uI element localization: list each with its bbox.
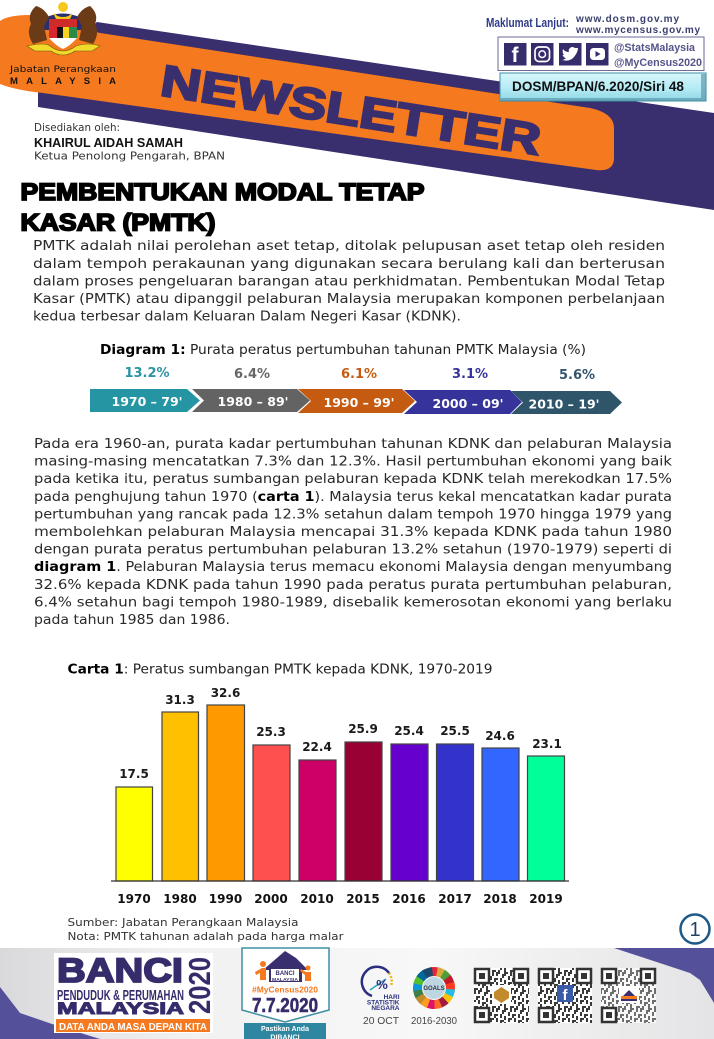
bar values: 23.1 xyxy=(532,737,562,751)
period 1990-99: 6.1% xyxy=(341,367,377,382)
bar chart xyxy=(111,686,569,906)
bar values: 24.6 xyxy=(485,729,515,743)
icon: sustainable development goals wheel xyxy=(411,965,457,1027)
main paragraph: masing-masing mencatatkan 7.3% dan 12.3%. Hasil pertumbuhan ekonomi yang baik xyxy=(34,455,673,470)
main paragraph: pada tahun 1985 dan 1986. xyxy=(34,613,230,628)
period 1970-79: 13.2% xyxy=(124,366,170,381)
census date badge: 7.7.2020 xyxy=(252,995,318,1017)
bar values: 25.5 xyxy=(440,724,470,738)
header banner xyxy=(0,15,714,210)
icon: sustainable development goals wheel: 2016-2030 xyxy=(411,1016,457,1027)
banci logo: DATA ANDA MASA DEPAN KITA xyxy=(59,1022,207,1033)
intro paragraph: kedua terbesar dalam Keluaran Dalam Negeri Kasar (KDNK). xyxy=(33,310,461,324)
QR code: department xyxy=(474,968,529,1023)
intro paragraph: dalam tempoh perakaunan yang digunakan secara berulang kali dan berterusan xyxy=(33,257,665,272)
diagram 1 timeline xyxy=(90,366,622,414)
icon: facebook xyxy=(504,43,526,67)
icon: hari statistik negara: 20 OCT xyxy=(363,1016,399,1027)
chart heading: Carta 1: Peratus sumbangan PMTK kepada KDNK, 1970-2019 xyxy=(68,662,492,678)
period 2000-09: 2000 – 09' xyxy=(433,396,503,411)
further information links: www.dosm.gov.my xyxy=(575,14,679,25)
period 1990-99 xyxy=(298,367,415,413)
year labels: 1990 xyxy=(209,892,242,906)
icon: hari statistik negara xyxy=(362,967,400,1027)
year labels: 2010 xyxy=(300,892,334,906)
census date badge: #MyCensus2020 xyxy=(252,984,318,994)
main paragraph: pada ketika itu, peratus sumbangan pelaburan kepada KDNK telah merekodkan 17.5% xyxy=(34,472,672,487)
period 2000-09 xyxy=(404,367,522,414)
bar values: 31.3 xyxy=(165,693,195,707)
further information links xyxy=(486,14,700,36)
year labels: 2017 xyxy=(438,892,472,906)
author block: Disediakan oleh: xyxy=(34,122,120,134)
period 1990-99: 1990 – 99' xyxy=(324,395,394,410)
banci logo: MALAYSIA xyxy=(57,999,184,1018)
department name xyxy=(9,65,116,87)
year labels: 2019 xyxy=(529,892,563,906)
period 2000-09: 3.1% xyxy=(452,367,488,382)
department name: MALAYSIA xyxy=(10,76,116,87)
bar values: 25.4 xyxy=(394,724,424,738)
intro paragraph xyxy=(33,239,665,324)
further information links: Maklumat Lanjut: xyxy=(486,16,569,30)
main paragraph: pada penghujung tahun 1970 ( carta 1 ). Malaysia terus kekal mencatatkan kadar purata xyxy=(34,490,672,505)
main paragraph: Pada era 1960-an, purata kadar pertumbuhan tahunan KDNK dan pelaburan Malaysia xyxy=(34,437,672,452)
census call to action: Pastikan Anda xyxy=(261,1026,309,1033)
year labels: 2016 xyxy=(392,892,426,906)
icon: instagram xyxy=(531,43,554,66)
icon: census house: BANCI xyxy=(276,971,295,977)
publication reference box xyxy=(500,73,706,101)
main paragraph: dengan purata peratus pertumbuhan pelaburan 13.2% setahun (1970-1979) seperti di xyxy=(34,543,672,558)
title xyxy=(20,179,424,236)
bar values: 17.5 xyxy=(119,767,149,781)
main paragraph xyxy=(34,437,673,628)
department name: Jabatan Perangkaan xyxy=(9,65,116,75)
banci logo: 2020 xyxy=(182,957,217,1014)
bar values: 22.4 xyxy=(302,740,332,754)
main paragraph: pertumbuhan yang rancak pada 12.3% setahun dalam tempoh 1970 hingga 1979 yang xyxy=(34,507,672,522)
icon: sustainable development goals wheel: GOALS xyxy=(423,986,445,992)
year labels: 1980 xyxy=(163,892,197,906)
title: KASAR (PMTK) xyxy=(20,210,216,236)
diagram 1 heading: Diagram 1: Purata peratus pertumbuhan tahunan PMTK Malaysia (%) xyxy=(100,343,586,358)
QR code: facebook: f xyxy=(562,987,568,1004)
bar values: 25.3 xyxy=(256,725,286,739)
year labels: 2018 xyxy=(483,892,517,906)
main paragraph: 6.4% setahun bagi tempoh 1980-1989, disebalik kemerosotan ekonomi yang berlaku xyxy=(34,595,672,610)
QR code: facebook xyxy=(538,968,592,1023)
period 2010-19: 5.6% xyxy=(559,368,595,383)
icon: facebook: f xyxy=(512,44,520,67)
main paragraph: diagram 1 . Pelaburan Malaysia terus memacu ekonomi Malaysia dengan menyumbang xyxy=(34,560,672,575)
banner navy band xyxy=(38,22,714,210)
icon: census house xyxy=(255,951,311,982)
bar values xyxy=(119,686,562,781)
banci logo: PENDUDUK & PERUMAHAN xyxy=(57,987,184,1004)
page number: 1 xyxy=(689,919,701,941)
social handles: @MyCensus2020 xyxy=(614,57,702,69)
publication reference box: DOSM/BPAN/6.2020/Siri 48 xyxy=(512,78,684,94)
year labels: 2015 xyxy=(346,892,380,906)
source note: Nota: PMTK tahunan adalah pada harga malar xyxy=(68,930,344,943)
intro paragraph: PMTK adalah nilai perolehan aset tetap, ditolak pelupusan aset tetap oleh residen xyxy=(33,239,665,254)
period 2010-19: 2010 – 19' xyxy=(529,396,599,412)
social handles: @StatsMalaysia xyxy=(614,42,696,54)
further information links: www.mycensus.gov.my xyxy=(575,25,700,36)
period 2010-19 xyxy=(511,368,622,414)
census call to action xyxy=(244,1023,326,1039)
bar values: 32.6 xyxy=(211,686,240,700)
newsletter wordmark: NEWSLETTER xyxy=(157,56,544,165)
author block: KHAIRUL AIDAH SAMAH xyxy=(34,136,183,150)
banci logo: BANCI xyxy=(57,952,183,990)
period 1980-89: 1980 – 89' xyxy=(218,394,288,409)
icon: hari statistik negara: % xyxy=(376,977,388,992)
main paragraph: 32.6% kepada KDNK pada tahun 1990 pada peratus purata pertumbuhan pelaburan, xyxy=(34,578,672,593)
icon: youtube xyxy=(586,43,608,66)
intro paragraph: dalam proses pengeluaran barangan atau perkhidmatan. Pembentukan Modal Tetap xyxy=(33,274,665,290)
icon: census house: MALAYSIA xyxy=(272,977,299,982)
icon: national crest xyxy=(27,2,100,55)
banci logo xyxy=(54,952,217,1033)
footer band xyxy=(0,948,714,1039)
page number xyxy=(680,914,710,944)
source note xyxy=(68,916,344,943)
source note: Sumber: Jabatan Perangkaan Malaysia xyxy=(68,916,298,929)
author block xyxy=(34,122,225,162)
social handles xyxy=(614,42,702,69)
icon: hari statistik negara: HARI xyxy=(384,994,400,1001)
QR code: census xyxy=(601,968,656,1023)
year labels xyxy=(117,892,563,906)
main paragraph: membolehkan pelaburan Malaysia mencapai 31.3% kepada KDNK pada tahun 1980 xyxy=(34,525,672,540)
banner orange band xyxy=(0,15,614,170)
year labels: 2000 xyxy=(254,892,288,906)
year labels: 1970 xyxy=(117,892,151,906)
title: PEMBENTUKAN MODAL TETAP xyxy=(20,179,424,206)
icon: hari statistik negara: STATISTIK xyxy=(367,1000,400,1006)
icon: hari statistik negara: NEGARA xyxy=(371,1005,400,1012)
period 1980-89 xyxy=(192,367,310,412)
period 1970-79: 1970 – 79' xyxy=(112,394,182,409)
social media box xyxy=(498,37,704,70)
census date badge xyxy=(242,948,329,1022)
period 1970-79 xyxy=(90,366,200,412)
bar values: 25.9 xyxy=(348,722,378,736)
intro paragraph: Kasar (PMTK) atau dipanggil pelaburan Malaysia merupakan komponen perbelanjaan xyxy=(33,292,665,307)
period 1980-89: 6.4% xyxy=(234,367,270,382)
icon: twitter xyxy=(559,43,582,66)
author block: Ketua Penolong Pengarah, BPAN xyxy=(34,150,225,162)
